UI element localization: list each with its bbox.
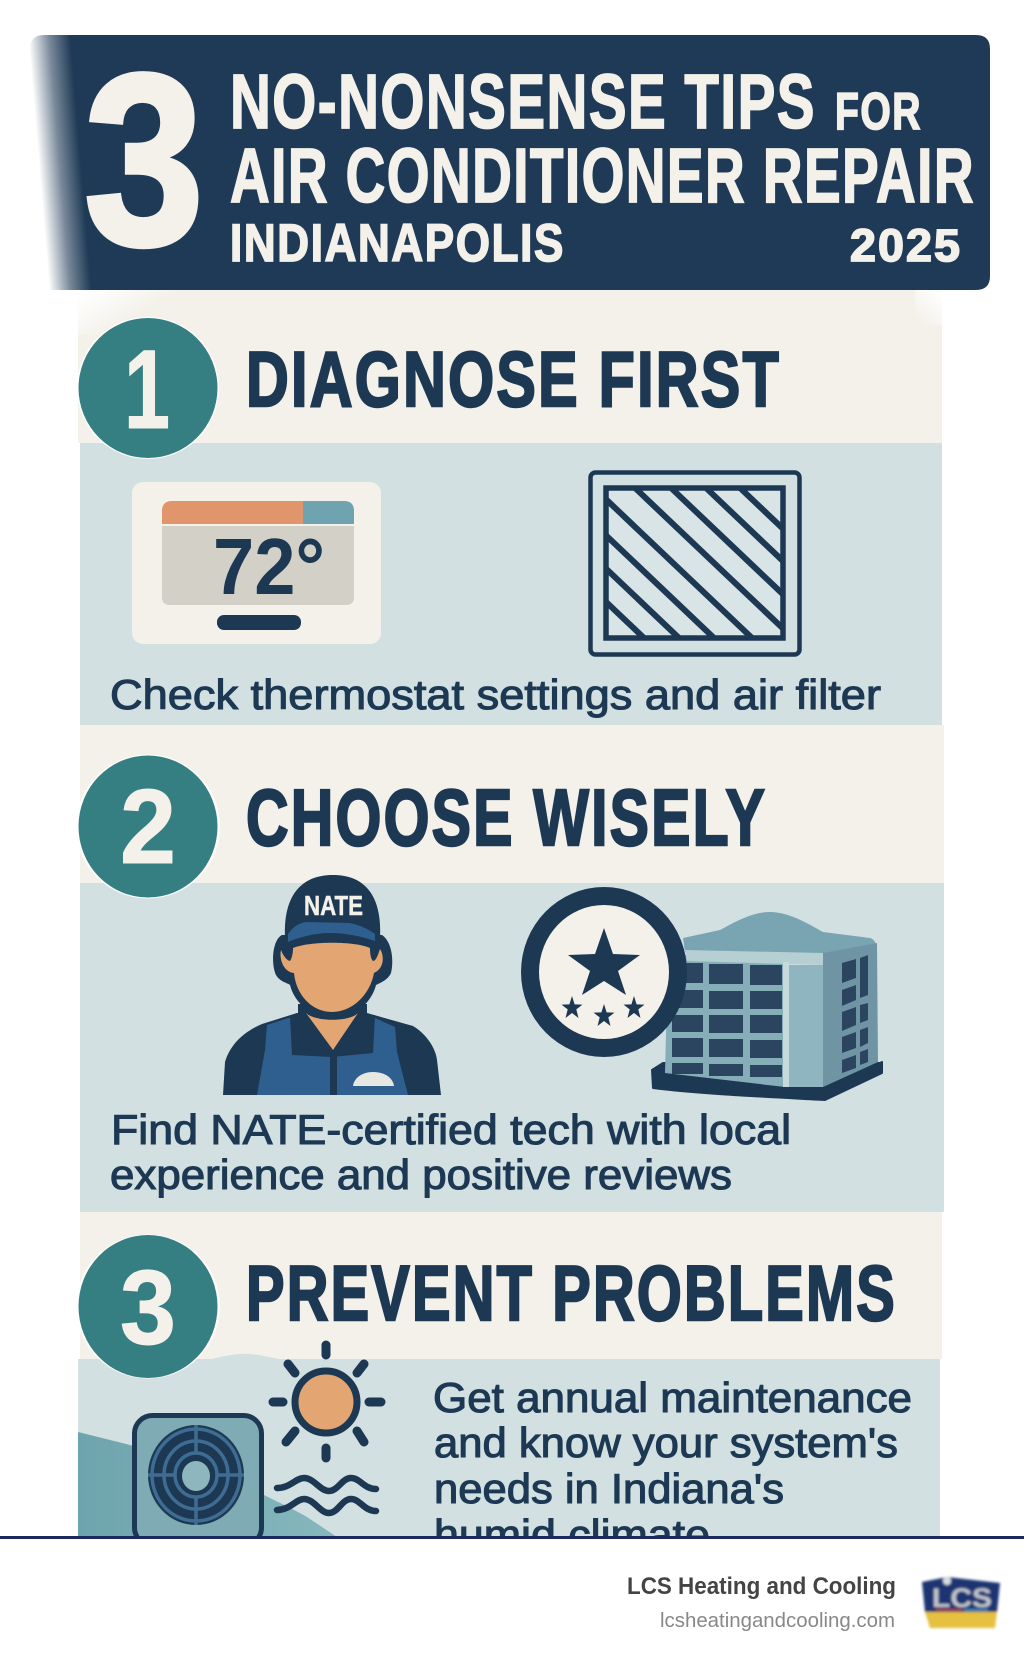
step 1 caption: Check thermostat settings and air filter (110, 671, 881, 718)
panel: section 1 heading band (76, 290, 944, 443)
step 2 number badge: 2 (120, 768, 176, 886)
step 2 caption: experience and positive reviews (110, 1151, 732, 1198)
footer company name: LCS Heating and Cooling (627, 1573, 896, 1600)
step 1 number badge (77, 317, 219, 459)
step 3 caption: Get annual maintenance (433, 1374, 912, 1421)
step 2 heading: CHOOSE WISELY (246, 773, 767, 862)
panel: section 1 body (80, 443, 942, 725)
unit roof (683, 912, 877, 955)
step 3 caption: humid climate (434, 1511, 710, 1558)
banner background (30, 35, 990, 290)
title line 1: NO-NONSENSE TIPS (230, 59, 816, 145)
technician cap (285, 875, 380, 938)
icon: AC fan unit (134, 1416, 262, 1546)
icon: air filter (588, 470, 802, 657)
header banner (30, 23, 990, 296)
step 3 caption: and know your system's (434, 1419, 898, 1466)
icon: technician (223, 875, 441, 1095)
unit side panel (823, 943, 878, 1087)
big number 3: 3 (84, 23, 204, 296)
subtitle: city: INDIANAPOLIS (230, 214, 565, 273)
footer logo: LCS (932, 1583, 992, 1613)
step 1 heading: DIAGNOSE FIRST (246, 335, 781, 423)
footer website: lcsheatingandcooling.com (660, 1610, 895, 1632)
icon: star rating badge (521, 887, 687, 1057)
title word: for: FOR (835, 83, 922, 141)
icon: outdoor AC unit (652, 912, 882, 1100)
panel: section 3 heading band (80, 1212, 942, 1359)
icon: thermostat (132, 482, 381, 644)
panel: section 2 body (80, 883, 944, 1212)
technician body (223, 1013, 441, 1095)
step 3 caption (433, 1374, 912, 1558)
step 3 number badge (76, 1234, 220, 1378)
panel: section 3 body (78, 1354, 940, 1537)
unit front grille (665, 955, 785, 1087)
step 3 caption: needs in Indiana's (434, 1465, 784, 1512)
icon: humidity waves (277, 1478, 376, 1513)
icon: sun (273, 1345, 381, 1458)
cap label: NATE (304, 890, 363, 921)
footer logo (922, 1577, 1000, 1628)
step 2 caption: Find NATE-certified tech with local (111, 1106, 791, 1153)
technician head (298, 1004, 367, 1022)
step 3 number badge: 3 (120, 1249, 176, 1367)
thermostat reading: 72° (213, 522, 325, 611)
panel: section 2 heading band (80, 725, 944, 883)
year: 2025 (850, 220, 962, 271)
step 1 number badge: 1 (124, 327, 170, 452)
step 2 number badge (76, 754, 220, 898)
footer (0, 1536, 1024, 1666)
step 2 caption (110, 1106, 791, 1198)
